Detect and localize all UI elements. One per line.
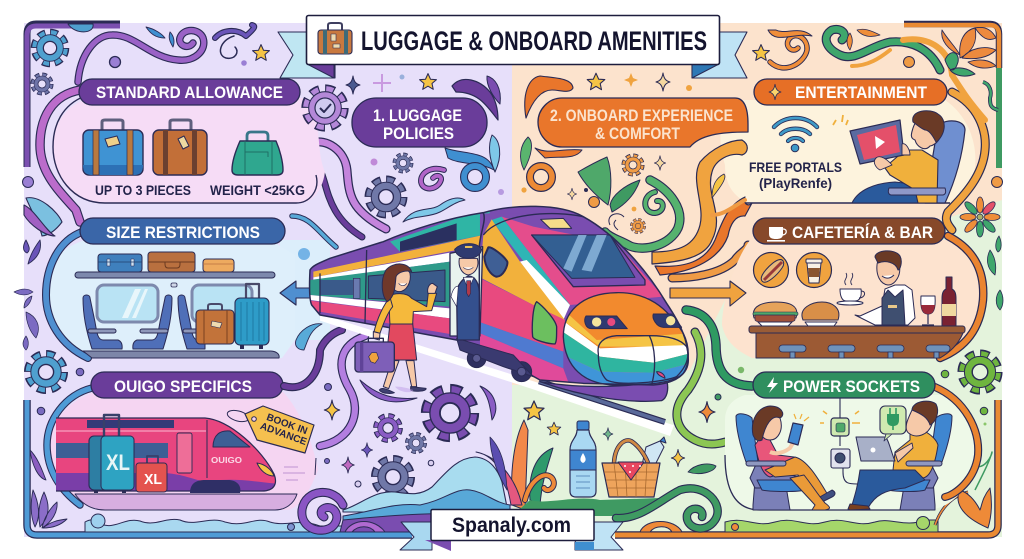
person with tablet [833, 111, 965, 203]
heading: onboard experience and comfort [538, 98, 748, 147]
heading: cafeteria and bar: CAFETERÍA & BAR [792, 223, 933, 242]
ribbon: footer left [400, 522, 451, 551]
person: waiter [837, 251, 915, 325]
train [308, 206, 690, 436]
ribbon: footer right [575, 522, 623, 550]
heading: ouigo specifics: OUIGO SPECIFICS [114, 377, 252, 396]
label: weight: WEIGHT <25KG [210, 182, 305, 198]
icon: teal bag [232, 132, 283, 175]
icon: train seats [83, 295, 205, 349]
icon: wine glass and bottle [921, 277, 956, 326]
tag: book in advance [226, 406, 314, 453]
train: ouigo [50, 415, 280, 495]
heading: standard allowance: STANDARD ALLOWANCE [96, 83, 283, 102]
panel: power sockets [725, 387, 978, 510]
left edge flourishes [14, 176, 84, 480]
label: free portals: FREE PORTALS [749, 159, 842, 175]
icon: small XL suitcase [136, 456, 167, 492]
icon: small XL suitcase: XL [144, 471, 162, 488]
wheels [457, 338, 533, 382]
heading: luggage policies: POLICIES [383, 124, 454, 143]
icon: check gear [306, 89, 344, 127]
right top flourishes [521, 29, 985, 278]
icon: teal case [235, 284, 269, 349]
panel: ouigo specifics [47, 388, 318, 510]
train cab window [532, 235, 645, 287]
icon: brown suitcase [153, 120, 207, 175]
icon: coffee cup [796, 252, 832, 288]
heading: standard allowance [79, 79, 300, 105]
person: passenger [355, 264, 437, 393]
panel: size restrictions [45, 232, 295, 358]
arrow: left [280, 281, 310, 305]
person: conductor [451, 244, 482, 340]
icon: luggage on shelf [75, 252, 275, 278]
panel: cafeteria and bar [722, 236, 985, 358]
footer: website: Spanaly.com [452, 514, 571, 537]
train: ouigo: OUIGO [211, 456, 242, 465]
heading: cafeteria and bar [753, 218, 945, 244]
heading: onboard experience and comfort: 2. ONBOARD EXPERIENCE [550, 106, 733, 125]
icon: title suitcase [318, 23, 352, 54]
right bottom flourishes [512, 310, 992, 532]
label: up to 3 pieces: UP TO 3 PIECES [95, 182, 191, 198]
panel: entertainment [720, 92, 985, 230]
heading: luggage policies: 1. LUGGAGE [373, 106, 462, 125]
center bottom plants [476, 420, 553, 510]
tag: book in advance: BOOK IN [265, 412, 309, 437]
heading: onboard experience and comfort: & COMFORT [595, 124, 681, 143]
heading: size restrictions: SIZE RESTRICTIONS [106, 223, 260, 242]
heading: entertainment [754, 79, 947, 105]
label: PlayRenfe: (PlayRenfe) [759, 175, 832, 191]
icon: flower top right [942, 27, 998, 110]
title: LUGGAGE & ONBOARD AMENITIES [361, 26, 707, 56]
icon: wifi [774, 118, 817, 152]
panel: standard allowance [40, 90, 325, 222]
icon: sandwich [753, 302, 798, 326]
heading: entertainment: ENTERTAINMENT [795, 83, 928, 102]
icon: XL suitcase: XL [106, 450, 130, 475]
icon: bread [802, 302, 839, 326]
icon: blue suitcase [83, 120, 143, 175]
ribbon: title left [278, 32, 335, 78]
tag: book in advance: ADVANCE [258, 421, 308, 448]
heading: power sockets [753, 372, 935, 398]
heading: ouigo specifics [91, 372, 283, 398]
bar counter [749, 326, 965, 358]
ribbon: title right [692, 32, 747, 78]
person: man with laptop [848, 401, 952, 510]
icon: XL suitcase [89, 415, 134, 493]
left top flourishes [33, 24, 504, 260]
socket diagram [820, 398, 860, 484]
icon: flower right side [941, 176, 1003, 426]
arrow: right [670, 281, 746, 306]
icon: hot dog [754, 252, 788, 288]
heading: luggage policies [352, 98, 487, 147]
icon: picnic basket [602, 437, 666, 497]
title [306, 16, 720, 64]
icon: brown case [196, 304, 234, 344]
icon: train windows [97, 283, 252, 322]
bottom left flourishes [31, 324, 512, 532]
heading: power sockets: POWER SOCKETS [783, 377, 920, 396]
person: woman with phone [736, 406, 835, 510]
heading: size restrictions [80, 218, 285, 244]
icon: water bottle [570, 421, 596, 497]
footer: website [431, 510, 594, 540]
